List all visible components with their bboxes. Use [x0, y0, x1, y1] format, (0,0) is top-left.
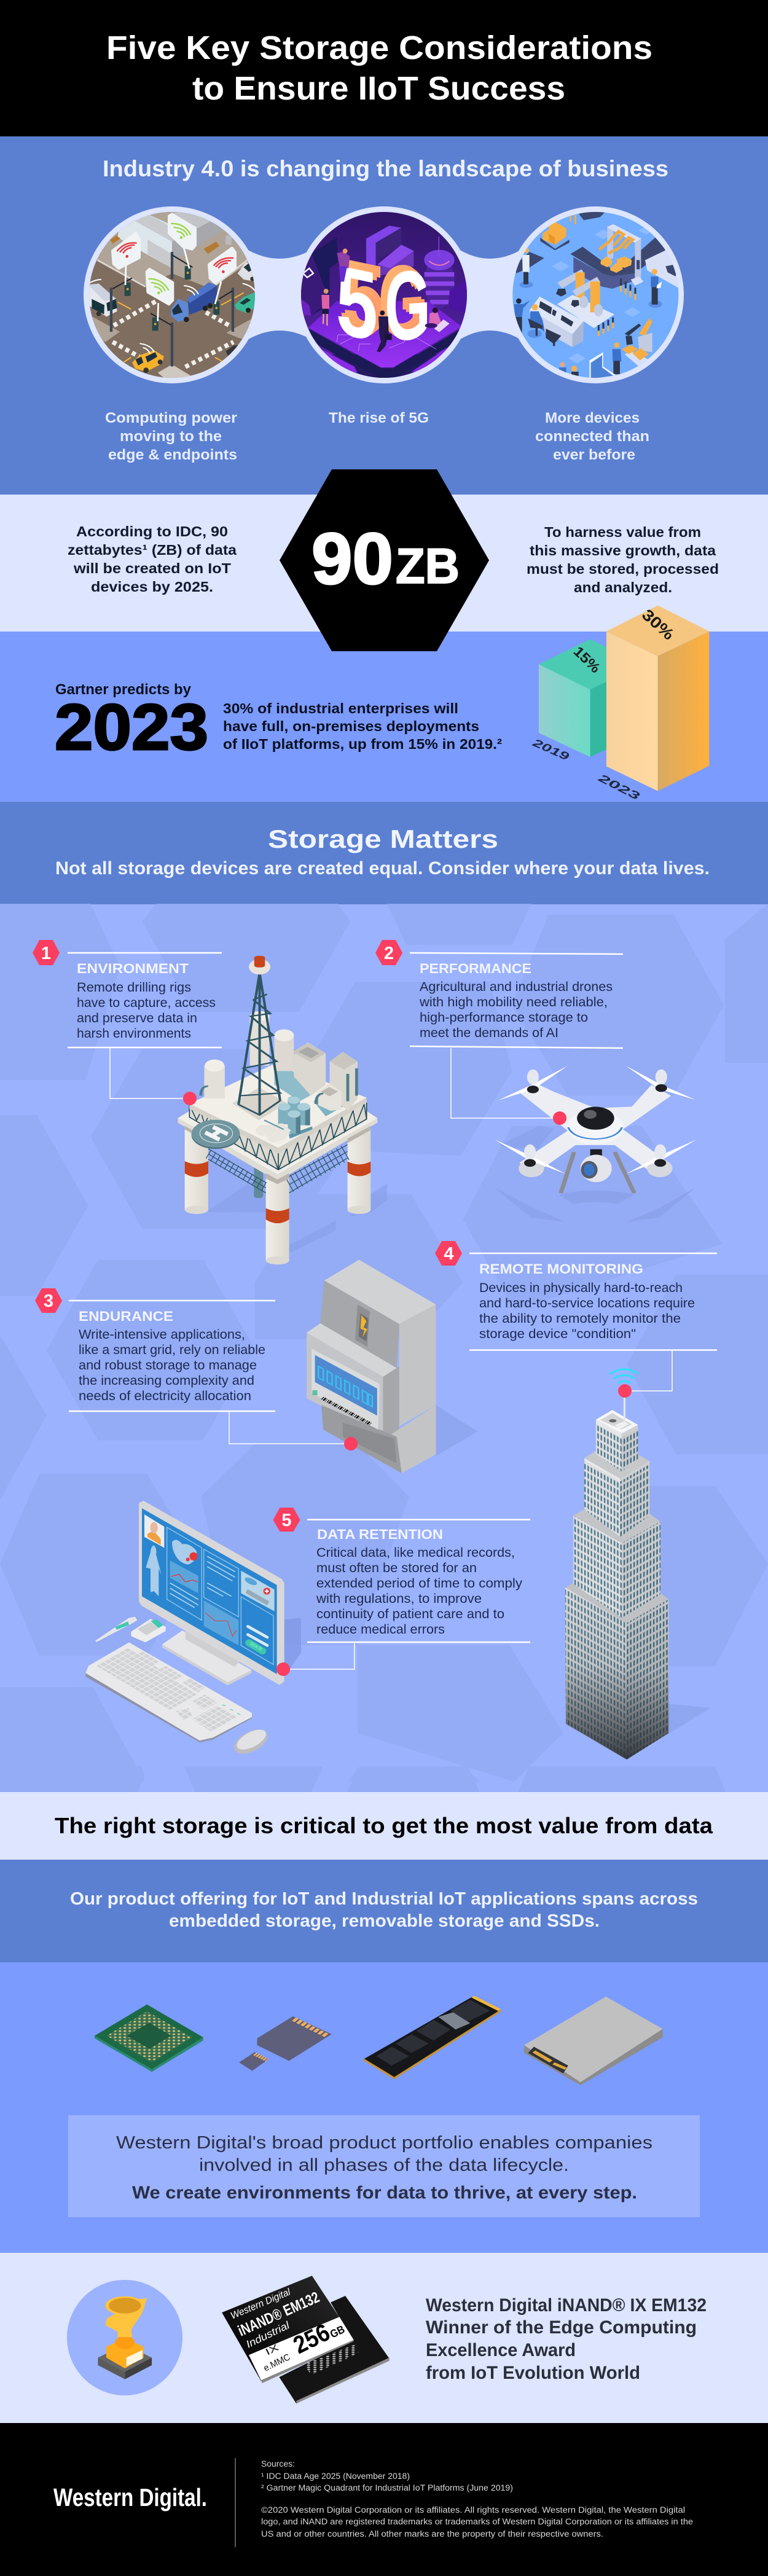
text: sources and legal — [261, 2459, 693, 2539]
title: to Ensure IIoT Success — [192, 70, 565, 107]
text: Gartner prediction: 2023 — [55, 691, 208, 764]
callout 3: endurance: Write-intensive applications, — [79, 1328, 245, 1342]
connector: skyscraper — [618, 1350, 672, 1398]
hexagon: 90ZB — [280, 469, 489, 651]
callout 4: remote monitoring: REMOTE MONITORING — [479, 1261, 643, 1277]
hexagon: 90ZB: ZB — [396, 539, 460, 594]
title: Five Key Storage Considerations — [106, 29, 652, 66]
text: harness value: must be stored, processed — [527, 561, 719, 577]
illustration: smart traffic circle — [88, 211, 256, 383]
callout 5: data retention: reduce medical errors — [316, 1623, 445, 1637]
illustration: skyscraper — [565, 1401, 711, 1760]
text: Gartner prediction: Gartner predicts by — [55, 681, 192, 698]
illustration: smart factory circle — [510, 209, 682, 381]
text: IDC prediction: According to IDC, 90 — [76, 523, 228, 539]
text: award winner: from IoT Evolution World — [426, 2363, 640, 2383]
panel: right storage banner — [0, 1792, 768, 1860]
captions: three trends: Computing power — [105, 410, 237, 426]
icon: trophy — [67, 2280, 182, 2395]
panel: storage matters heading band: Storage Matters — [268, 824, 498, 853]
callout 2: performance: with high mobility need reliable, — [419, 995, 608, 1009]
text panel: portfolio: We create environments for data to thrive, at every step. — [132, 2183, 637, 2203]
antenna signal — [610, 1369, 638, 1421]
illustration: medical computer — [85, 1501, 301, 1759]
text panel: portfolio — [68, 2115, 700, 2217]
thermometer — [95, 1617, 137, 1642]
panel: product offering: embedded storage, removable storage and SSDs. — [169, 1911, 600, 1931]
callout 4: remote monitoring: and hard-to-service locations require — [479, 1296, 695, 1310]
SD and microSD cards — [239, 2016, 332, 2071]
captions: three trends: connected than — [535, 428, 649, 445]
callout 2: performance: high-performance storage to — [420, 1011, 588, 1025]
illustration: iNAND chip: 256 — [289, 2319, 334, 2359]
blood pressure device — [131, 1619, 166, 1642]
text: sources and legal: logo, and iNAND are registered trademarks or trademarks of Western Digital Corporation or its affiliates in the — [261, 2517, 693, 2526]
panel: award — [0, 2253, 768, 2423]
text: IDC prediction — [68, 523, 237, 595]
callout 3: endurance: 3 — [44, 1291, 53, 1311]
panel: storage matters heading band: Not all storage devices are created equal. Consider where your data lives. — [55, 858, 710, 879]
captions: three trends: edge & endpoints — [108, 447, 237, 463]
monitor: SIGN IN — [249, 1641, 263, 1652]
illustration: iNAND chip: Industrial — [244, 2319, 292, 2351]
panel: right storage banner: The right storage is critical to get the most value from data — [55, 1813, 713, 1838]
panel: footer — [0, 2423, 768, 2576]
callout 4: remote monitoring: 4 — [444, 1244, 454, 1264]
text panel: portfolio: Western Digital's broad product portfolio enables companies — [116, 2133, 652, 2153]
callout 1: environment: and preserve data in — [77, 1011, 197, 1025]
connector: rig — [110, 1048, 197, 1105]
panel: storage matters heading band — [0, 802, 768, 904]
header band — [0, 0, 768, 136]
panel: products — [0, 1962, 768, 2253]
illustration: iNAND chip: Western Digital — [229, 2287, 292, 2322]
callout 4: remote monitoring: the ability to remotely monitor the — [479, 1312, 681, 1326]
connector: meter — [229, 1411, 358, 1450]
5G numeral: G — [382, 246, 428, 359]
illustration: iNAND chip — [222, 2276, 390, 2403]
illustration: iNAND chip: IX — [264, 2343, 281, 2358]
chart: isometric bars 2019 vs 2023: 15% — [571, 643, 604, 676]
callout 5: data retention: continuity of patient care and to — [316, 1607, 504, 1621]
callout 3: endurance: like a smart grid, rely on reliable — [79, 1343, 265, 1357]
panel: 90ZB band — [0, 495, 768, 632]
callout 3: endurance: needs of electricity allocation — [79, 1389, 251, 1403]
text: award winner: Excellence Award — [426, 2340, 576, 2360]
panel: Gartner band — [0, 632, 768, 802]
callout 5: data retention: DATA RETENTION — [317, 1527, 443, 1542]
text: harness value — [527, 524, 719, 595]
2.5 inch SSD — [524, 1997, 663, 2085]
captions: three trends — [105, 410, 649, 463]
illustration: iNAND chip: e.MMC — [262, 2352, 292, 2374]
text: Gartner prediction: 30% of industrial enterprises will — [223, 700, 458, 716]
callout 2: performance: meet the demands of AI — [420, 1026, 558, 1040]
panel: storage considerations background — [0, 904, 768, 1793]
callout 2: performance: Agricultural and industrial drones — [420, 980, 613, 994]
callout 2: performance: PERFORMANCE — [420, 961, 531, 976]
text: harness value: this massive growth, data — [530, 542, 716, 558]
callout 5: data retention: extended period of time to comply — [316, 1576, 523, 1591]
divider — [235, 2458, 236, 2547]
callout 1: environment: harsh environments — [77, 1027, 191, 1041]
text panel: portfolio: involved in all phases of the data lifecycle. — [199, 2155, 569, 2175]
callout 1: environment — [33, 940, 222, 1047]
callout 3: endurance — [35, 1288, 275, 1411]
illustration: oil rig — [178, 956, 387, 1264]
text: IDC prediction: devices by 2025. — [91, 579, 213, 595]
chart: isometric bars 2019 vs 2023: 2023 — [596, 771, 641, 802]
heading: industry: Industry 4.0 is changing the landscape of business — [103, 156, 668, 181]
text: harness value: and analyzed. — [574, 579, 672, 595]
text: sources and legal: ©2020 Western Digital Corporation or its affiliates. All rights reserved. Western Digital, the Western Digital — [261, 2505, 685, 2515]
callout 5: data retention — [273, 1508, 530, 1642]
panel: product offering — [0, 1860, 768, 1962]
callout 5: data retention: with regulations, to improve — [316, 1592, 482, 1606]
text: award winner — [426, 2295, 707, 2383]
illustration: iNAND chip: GB — [328, 2323, 347, 2341]
panel: industry 4.0 — [0, 136, 768, 495]
callout 1: environment: 1 — [41, 944, 51, 963]
people — [337, 252, 350, 268]
5G numeral: 5 — [343, 239, 385, 357]
helipad — [192, 1120, 240, 1149]
callout 4: remote monitoring: Devices in physically hard-to-reach — [479, 1281, 683, 1295]
chart: isometric bars 2019 vs 2023: 2019 — [530, 736, 571, 763]
captions: three trends: The rise of 5G — [329, 410, 429, 426]
callout 3: endurance: ENDURANCE — [79, 1309, 173, 1324]
mouse — [230, 1725, 272, 1759]
captions: three trends: More devices — [545, 410, 640, 426]
M.2 SSD — [364, 1997, 501, 2078]
callout 2: performance: 2 — [384, 944, 394, 963]
text: harness value: To harness value from — [544, 524, 701, 540]
text: Gartner prediction: of IIoT platforms, up from 15% in 2019.² — [223, 736, 502, 752]
callout 5: data retention: 5 — [281, 1511, 292, 1530]
callout 3: endurance: the increasing complexity and — [79, 1374, 254, 1388]
text: sources and legal: US and or other countries. All other marks are the property of their respective owners. — [261, 2529, 603, 2539]
product images — [95, 1997, 663, 2085]
chart: isometric bars 2019 vs 2023: 30% — [638, 605, 678, 644]
panel: product offering: Our product offering for IoT and Industrial IoT applications spans across — [70, 1889, 698, 1909]
callout 1: environment: ENVIRONMENT — [77, 961, 189, 976]
text: IDC prediction: will be created on IoT — [73, 560, 231, 576]
callout 5: data retention: Critical data, like medical records, — [316, 1546, 515, 1560]
text: sources and legal: ² Gartner Magic Quadrant for Industrial IoT Platforms (June 2019) — [261, 2483, 513, 2492]
illustration: smart meter — [307, 1260, 477, 1473]
callout 3: endurance: and robust storage to manage — [79, 1358, 257, 1372]
callout 1: environment: Remote drilling rigs — [77, 981, 191, 995]
connector: drone — [451, 1048, 566, 1125]
illustration: iNAND chip: iNAND® EM132 — [235, 2288, 322, 2339]
text: Gartner prediction: have full, on-premises deployments — [223, 718, 479, 734]
boilers — [256, 1123, 291, 1142]
callout 4: remote monitoring — [435, 1241, 717, 1350]
connector: computer — [276, 1642, 355, 1676]
connected circle frame — [84, 206, 684, 383]
embedded chip — [95, 2005, 203, 2072]
5G numeral — [338, 260, 427, 340]
text: sources and legal: Sources: — [261, 2459, 295, 2468]
logo: Western Digital: Western Digital. — [53, 2483, 207, 2511]
illustration: drone — [495, 1065, 697, 1222]
keyboard — [85, 1642, 252, 1742]
monitor — [139, 1501, 284, 1685]
callout 1: environment: have to capture, access — [77, 996, 216, 1010]
storage tanks — [278, 1096, 312, 1138]
callout 2: performance — [375, 940, 623, 1048]
callout 4: remote monitoring: storage device "condition" — [479, 1327, 636, 1341]
text: award winner: Western Digital iNAND® IX EM132 — [426, 2295, 707, 2316]
5G numeral: 5 — [340, 241, 382, 360]
illustration: 5G city circle — [299, 211, 469, 379]
text: Gartner prediction — [55, 681, 502, 764]
captions: three trends: ever before — [553, 447, 635, 463]
chart: isometric bars 2019 vs 2023 — [530, 605, 709, 802]
5G numeral: G — [385, 249, 431, 362]
hexagon: 90ZB: 90 — [312, 519, 393, 600]
monitor stand — [162, 1628, 251, 1685]
text: IDC prediction: zettabytes¹ (ZB) of data — [68, 542, 237, 558]
text: sources and legal: ¹ IDC Data Age 2025 (November 2018) — [261, 2472, 410, 2481]
5G numeral: 5 — [336, 245, 378, 362]
callout 5: data retention: must often be stored for an — [316, 1561, 477, 1575]
text: award winner: Winner of the Edge Computing — [426, 2317, 697, 2338]
captions: three trends: moving to the — [120, 428, 222, 445]
5G numeral: G — [378, 244, 425, 357]
title — [106, 29, 652, 107]
